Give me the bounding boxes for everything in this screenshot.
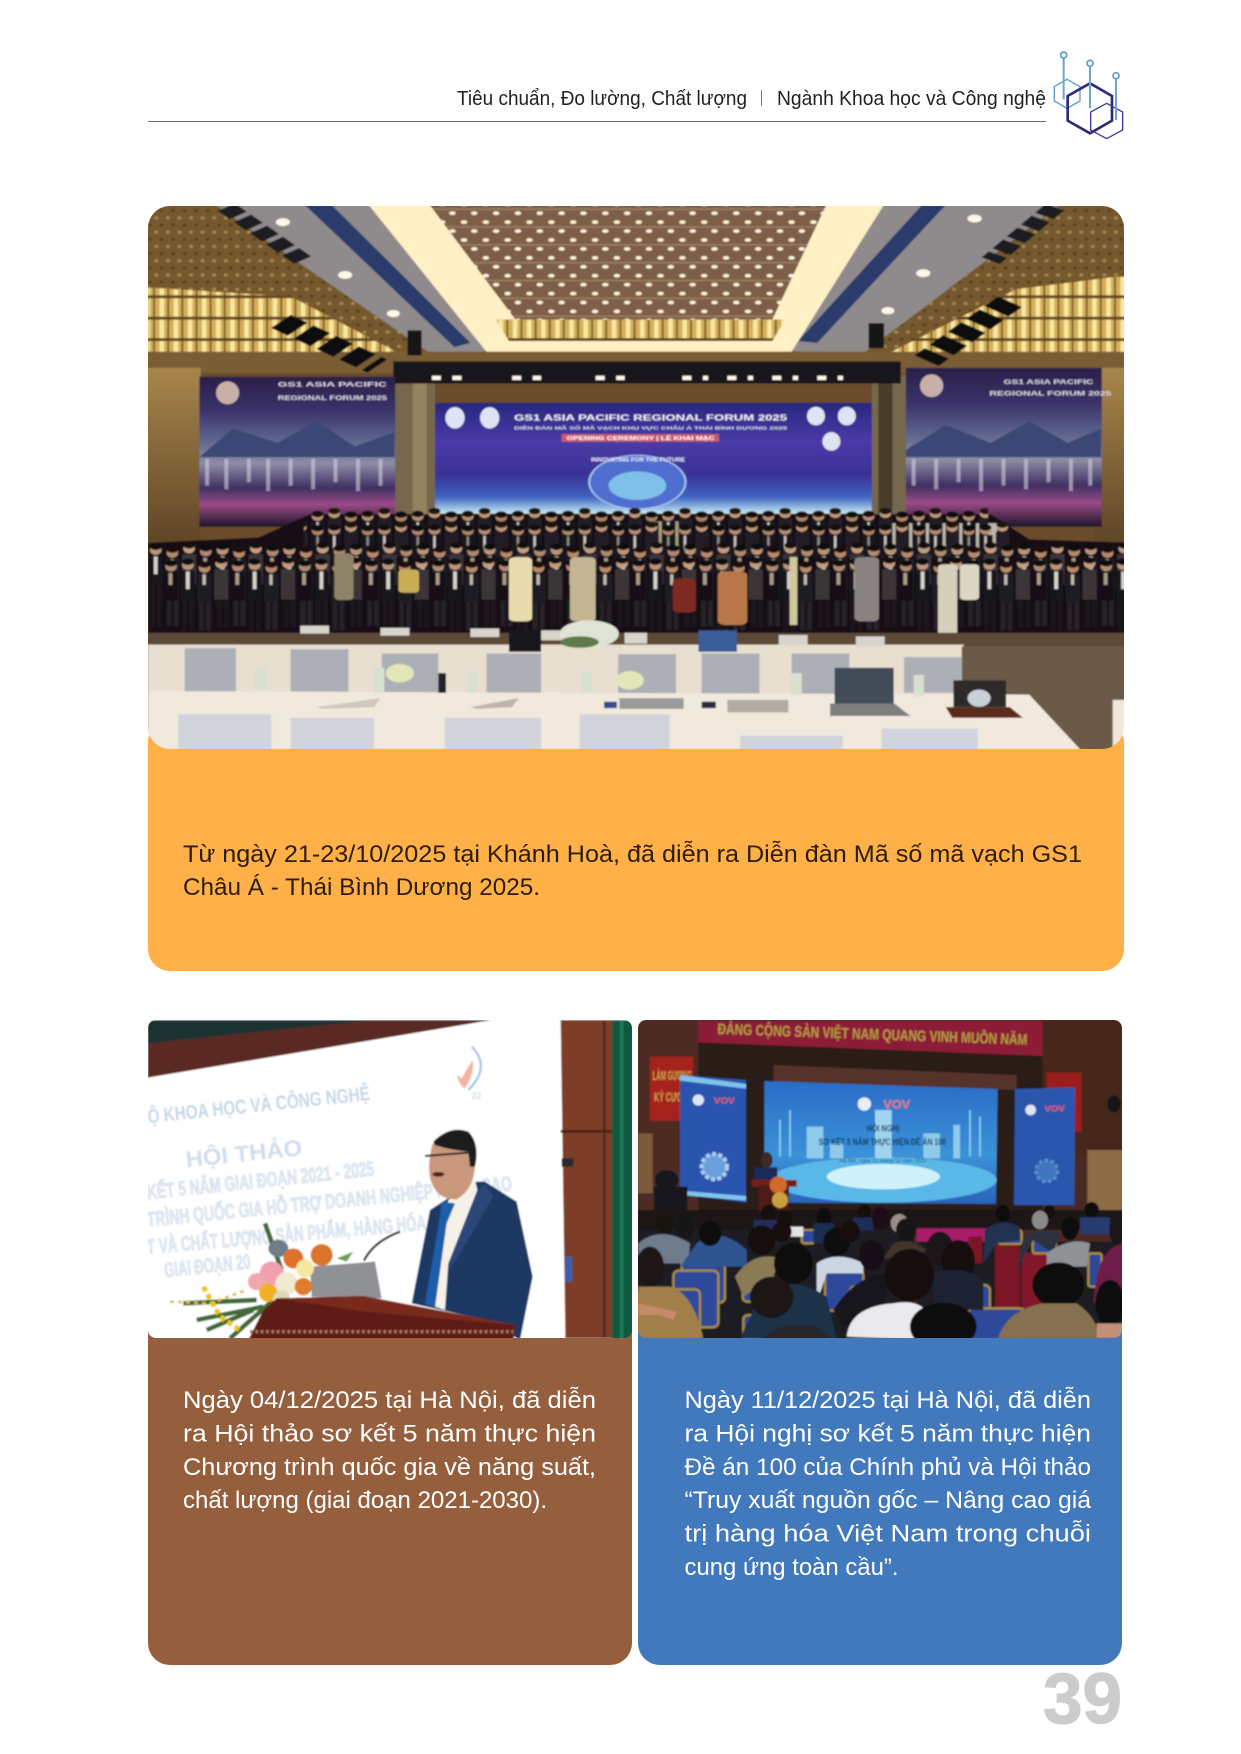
name cards [300, 626, 885, 646]
center LED screen: VOV [883, 1097, 910, 1111]
central LED screen: GS1 ASIA PACIFIC REGIONAL FORUM 2025 [514, 413, 787, 423]
screen body text [146, 1158, 513, 1282]
screen body text: KẾT 5 NĂM GIAI ĐOẠN 2021 - 2025 [146, 1158, 375, 1204]
audience base [638, 1230, 914, 1342]
flower centerpiece [560, 620, 619, 647]
stage floor [638, 1210, 1123, 1230]
ceiling coffer [368, 204, 885, 352]
left banner [199, 377, 395, 527]
right banner: GS1 ASIA PACIFIC [1004, 378, 1093, 386]
screen heading text: HỘI THẢO [184, 1134, 303, 1172]
central LED screen [435, 403, 872, 514]
laptop [310, 1262, 382, 1298]
audience middle rows [735, 1218, 983, 1340]
brown caption text: Ngày 04/12/2025 tại Hà Nội, đã diễn [183, 1387, 596, 1414]
center LED screen: Hà Nội, ngày 11 tháng 12 năm 2025 [839, 1159, 927, 1165]
audience front rows [636, 1247, 1125, 1351]
center LED screen: HỘI NGHỊ [867, 1123, 899, 1134]
right banner: REGIONAL FORUM 2025 [989, 390, 1112, 398]
orange caption text: Châu Á - Thái Bình Dương 2025. [183, 874, 540, 901]
blue caption text: Đề án 100 của Chính phủ và Hội thảo [684, 1454, 1091, 1481]
screen heading text [146, 1081, 371, 1172]
speaker at lectern [752, 1152, 797, 1213]
photo: conference hall audience [630, 1017, 1130, 1351]
photo: GS1 Asia Pacific forum group photo [143, 204, 1146, 754]
flowers [170, 1223, 353, 1338]
cameraman [654, 1170, 687, 1227]
right LED panel [1014, 1087, 1075, 1205]
brown caption text [183, 1387, 596, 1514]
brown caption panel [148, 1300, 632, 1665]
slogan banner [698, 1020, 1043, 1056]
slogan banner: ĐẢNG CỘNG SẢN VIỆT NAM QUANG VINH MUÔN NĂM [717, 1020, 1028, 1049]
podium [248, 1296, 516, 1340]
left red sign [650, 1057, 693, 1121]
wall panels [638, 1020, 699, 1210]
header ministry name: Ngành Khoa học và Công nghệ [777, 87, 1046, 110]
crowd [148, 508, 1146, 634]
central LED screen: INNOVATING FOR THE FUTURE [591, 457, 685, 463]
wood wall and curtain [561, 1020, 613, 1338]
audience rear rows [638, 1202, 1124, 1303]
photo: speaker at podium: 22 [472, 1091, 481, 1101]
laptops and table items [835, 668, 894, 704]
screen heading text: Ộ KHOA HỌC VÀ CÔNG NGHỆ [146, 1081, 371, 1128]
center LED screen [764, 1081, 998, 1204]
chairs [638, 1230, 1123, 1342]
blue caption panel [638, 1300, 1122, 1665]
screen body text: GIAI ĐOẠN 20 [163, 1250, 252, 1282]
right LED panel: VOV [1045, 1103, 1065, 1113]
front chairs [178, 714, 978, 749]
floor [148, 633, 1131, 649]
blue caption text: Ngày 11/12/2025 tại Hà Nội, đã diễn [684, 1387, 1091, 1414]
gold chandelier bands [148, 287, 400, 354]
microphone [364, 1232, 400, 1261]
screen body text: TRÌNH QUỐC GIA HỖ TRỢ DOANH NGHIỆP NÂNG CAO [146, 1171, 513, 1232]
front table [148, 691, 1081, 750]
ceiling wedge [148, 1020, 492, 1078]
screen body text: T VÀ CHẤT LƯỢNG SẢN PHẨM, HÀNG HÓA [146, 1211, 427, 1259]
ceiling corners [143, 204, 1132, 357]
blue caption text [684, 1387, 1091, 1581]
blue caption text: ra Hội nghị sơ kết 5 năm thực hiện [684, 1420, 1091, 1448]
right banner [906, 368, 1112, 527]
orange caption panel [148, 720, 1124, 971]
blue caption text: trị hàng hóa Việt Nam trong chuỗi [684, 1520, 1091, 1548]
back table with chairs [148, 645, 964, 695]
left red sign: KỶ CƯƠNG [654, 1090, 693, 1105]
truss with lights [393, 361, 901, 384]
stage lights [281, 321, 377, 366]
orange caption text [183, 841, 1082, 901]
right curtain [1087, 1150, 1123, 1223]
header section name: Tiêu chuẩn, Đo lường, Chất lượng [457, 87, 747, 110]
brown caption text: Chương trình quốc gia về năng suất, [183, 1454, 596, 1481]
icon: hexagon molecule logo [1054, 52, 1123, 139]
back drape [698, 1042, 1043, 1223]
blue caption text: cung ứng toàn cầu”. [684, 1554, 898, 1581]
left LED panel: VOV [714, 1095, 735, 1105]
left banner: REGIONAL FORUM 2025 [278, 394, 387, 402]
panel: Project 100 conference [630, 1017, 1130, 1665]
page number: 39 [1043, 1660, 1122, 1739]
central LED screen: OPENING CEREMONY | LỄ KHAI MẠC [567, 435, 715, 441]
left LED panel [680, 1075, 746, 1203]
brown caption text: ra Hội thảo sơ kết 5 năm thực hiện [183, 1420, 596, 1448]
wall sides [143, 368, 201, 546]
photo: speaker at podium [140, 1017, 640, 1342]
dresses [334, 554, 979, 641]
speaker [412, 1130, 533, 1340]
left banner: GS1 ASIA PACIFIC [278, 381, 387, 388]
panel: GS1 forum [143, 204, 1146, 971]
brown caption text: chất lượng (giai đoạn 2021-2030). [183, 1487, 547, 1514]
ceiling beams [213, 204, 493, 359]
blue caption text: “Truy xuất nguồn gốc – Nâng cao giá [684, 1487, 1091, 1514]
center LED screen: SƠ KẾT 5 NĂM THỰC HIỆN ĐỀ ÁN 100 [819, 1136, 946, 1147]
left red sign: LÀM GƯƠNG [653, 1068, 692, 1083]
right red sign [1047, 1073, 1082, 1132]
screen logo [468, 1047, 481, 1090]
header [148, 87, 1046, 122]
orange caption text: Từ ngày 21-23/10/2025 tại Khánh Hoà, đã diễn ra Diễn đàn Mã số mã vạch GS1 [183, 841, 1082, 868]
red tables [995, 1244, 1020, 1311]
panel: productivity workshop [140, 1017, 640, 1665]
central LED screen: DIỄN ĐÀN MÃ SỐ MÃ VẠCH KHU VỰC CHÂU Á THÁI BÌNH DƯƠNG 2025 [514, 424, 787, 431]
